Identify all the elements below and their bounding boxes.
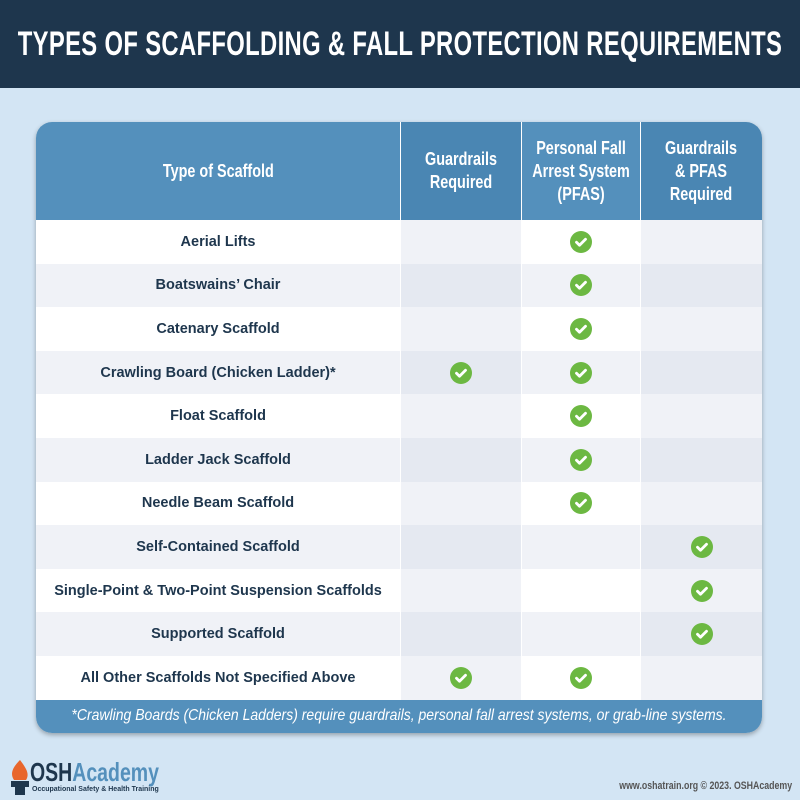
- row: Aerial Lifts: Aerial Lifts: [181, 234, 255, 250]
- header: both: [641, 122, 762, 220]
- header: PFAS: Arrest System: [532, 160, 630, 180]
- row: Boatswains' Chair: [36, 264, 762, 307]
- row: Needle Beam: Needle Beam Scaffold: [142, 495, 294, 511]
- row: Crawling Board: [36, 351, 762, 394]
- header: PFAS: (PFAS): [557, 184, 605, 204]
- row: Ladder Jack: Ladder Jack Scaffold: [145, 452, 291, 468]
- row: Ladder Jack: [36, 438, 762, 482]
- row: Supported: Supported Scaffold: [151, 626, 285, 642]
- row: Catenary: [156, 307, 762, 351]
- icon: torch: [11, 760, 29, 795]
- row: Catenary: Catenary Scaffold: [156, 321, 280, 337]
- row: Crawling Board: Crawling Board (Chicken Ladder)*: [100, 365, 336, 381]
- panel: table: [36, 122, 762, 733]
- logo: [11, 757, 159, 795]
- footnote: [36, 700, 762, 733]
- row: Supported: [36, 612, 762, 656]
- row: Float: Float Scaffold: [170, 408, 266, 424]
- row: Boatswains' Chair: Boatswains’ Chair: [156, 277, 280, 293]
- header: PFAS: [522, 122, 640, 220]
- rows: [36, 220, 762, 700]
- row: Aerial Lifts: [180, 220, 762, 264]
- header: guardrails: [401, 122, 521, 220]
- title: [0, 0, 800, 88]
- row: Self-Contained: Self-Contained Scaffold: [136, 539, 300, 555]
- copyright: www.oshatrain.org © 2023. OSHAcademy: [619, 780, 792, 792]
- row: Suspension: Single-Point & Two-Point Suspension Scaffolds: [54, 583, 382, 599]
- logo text: OSHAcademy: [30, 757, 159, 787]
- header: guardrails: Guardrails: [425, 149, 497, 169]
- header: both: Required: [670, 184, 733, 204]
- header: both: & PFAS: [675, 160, 727, 180]
- header: both: Guardrails: [665, 138, 738, 158]
- row: Float: [170, 394, 762, 438]
- header: type of scaffold: [36, 122, 400, 220]
- header: guardrails: Required: [430, 172, 492, 192]
- title: TYPES OF SCAFFOLDING & FALL PROTECTION REQUIREMENTS: [18, 25, 782, 63]
- row: All Other: All Other Scaffolds Not Specified Above: [80, 670, 356, 686]
- header: PFAS: Personal Fall: [536, 138, 626, 158]
- row: All Other: [80, 656, 762, 700]
- row: Suspension: [54, 569, 762, 612]
- header: type of scaffold: Type of Scaffold: [163, 160, 273, 180]
- row: Self-Contained: [36, 525, 762, 569]
- logo: Occupational Safety & Health Training: [32, 786, 159, 793]
- footnote: *Crawling Boards (Chicken Ladders) require guardrails, personal fall arrest systems, or grab-line systems.: [71, 707, 727, 724]
- row: Needle Beam: [142, 482, 762, 525]
